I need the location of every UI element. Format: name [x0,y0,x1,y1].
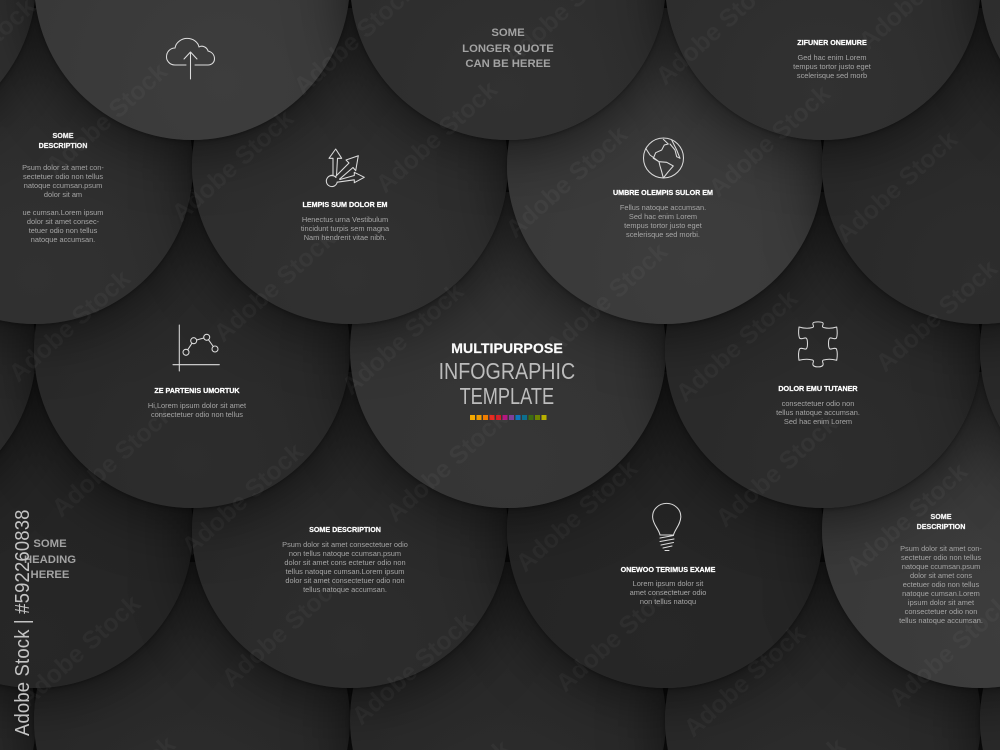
panel: cloud upload [34,0,350,140]
text block: some description right: SOME [930,513,952,521]
text block: some description right: DESCRIPTION [917,523,965,531]
vertical stock id label: Adobe Stock | #592260838 [11,509,34,736]
text block: some description: dolor sit amet cons ectetuer odio non [284,558,406,567]
title: multipurpose infographic template: INFOGRAPHIC [439,358,575,384]
icon: light bulb [652,502,682,551]
text block: zifuner onemure: tempus tortor justo eget [793,62,871,71]
watermark layer: Adobe Stock [209,224,341,348]
quote text [462,27,554,70]
panel: some description left [0,8,193,324]
text block: onewoo terimus exame: Lorem ipsum dolor sit [633,579,703,588]
quote text: CAN BE HEREE [465,58,551,70]
panel: some description wide [192,372,508,688]
watermark layer: Adobe Stock [671,284,803,408]
text block: lempis sum dolor em: Nam hendrerit vitae nibh. [304,233,386,242]
watermark layer: Adobe Stock [551,574,683,698]
text block: dolor emu tutaner [776,385,860,426]
text block: umbre olempis sulor em: Sed hac enim Lorem [629,212,697,221]
title: multipurpose infographic template: TEMPLATE [460,383,554,409]
heading: some heading here [24,538,76,581]
circle: top row left edge [0,0,36,140]
watermark layer: Adobe Stock [167,104,299,228]
panel: onewoo terimus exame [507,372,823,688]
text block: onewoo terimus exame [620,566,716,606]
title: multipurpose infographic template [439,341,575,409]
heading: some heading here: SOME [33,538,67,550]
circle: bottom row right [665,562,981,750]
watermark layer: Adobe Stock [217,569,349,693]
panel: lempis sum dolor em [192,8,508,324]
title: multipurpose infographic template: MULTIPURPOSE [451,341,563,357]
text block: some description: tellus natoque cumsan.Lorem ipsum [286,567,404,576]
text block: some description right: dolor sit amet cons [910,571,972,580]
quote text: LONGER QUOTE [462,42,554,54]
watermark layer: Adobe Stock [511,454,643,578]
text block: some description right: Psum dolor sit amet con- [900,544,982,552]
watermark layer: Adobe Stock [831,125,963,249]
text block: some description left: Psum dolor sit amet con- [22,162,104,172]
text block: some description left: DESCRIPTION [39,142,87,150]
text block: some description: tellus natoque accumsan. [303,585,387,594]
text block: some description right: ipsum dolor sit amet [908,598,974,607]
panel: some heading here [0,372,193,688]
text block: some description right: consectetuer odio non [905,607,977,616]
watermark layer: Adobe Stock [501,120,633,244]
text block: umbre olempis sulor em: Fellus natoque accumsan. [620,203,706,212]
text block: lempis sum dolor em: Henectus urna Vestibulum [302,215,388,224]
panel: zifuner onemure [665,0,981,140]
panel: dolor emu tutaner [665,192,981,508]
text block: ze partenis umortuk: consectetuer odio non tellus [151,410,243,419]
circle: bottom row left [34,562,350,750]
watermark layer: Adobe Stock [371,75,503,199]
heading: some heading here: HEADING [24,554,76,566]
text block: ze partenis umortuk: Hi,Lorem ipsum dolor sit amet [148,401,246,410]
text block: zifuner onemure: Ged hac enim Lorem [797,53,866,62]
text block: lempis sum dolor em [301,201,390,242]
icon: puzzle piece [798,321,838,368]
text block: some description [282,526,408,594]
heading: some heading here: HEREE [31,569,69,581]
text block: some description right: natoque ccumsan.psum [902,562,980,571]
text block: some description right [899,513,983,625]
watermark layer: Adobe Stock [871,254,1000,378]
circle: second row right edge [822,8,1000,324]
circle: middle row left edge [0,192,36,508]
circle: bottom row left edge [0,562,36,750]
watermark layer: Adobe Stock [41,57,173,181]
text block: some description left [22,132,104,244]
icon: line chart [172,324,220,372]
icon: branching arrows [326,148,365,188]
watermark layer: Adobe Stock [679,619,811,743]
text block: some description left: ue cumsan.Lorem ipsum [23,208,103,217]
text block: lempis sum dolor em: tincidunt turpis sem magna [301,224,389,233]
text block: onewoo terimus exame: amet consectetuer odio [630,588,706,597]
text block: dolor emu tutaner: tellus natoque accumsan. [776,408,860,417]
text block: onewoo terimus exame: ONEWOO TERIMUS EXAME [621,566,715,574]
quote text: SOME [491,27,525,39]
circle: bottom row right edge [980,562,1000,750]
watermark layer: Adobe Stock [381,404,513,528]
watermark layer: Adobe Stock [177,437,309,561]
text block: ze partenis umortuk: ZE PARTENIS UMORTUK [154,387,240,395]
text block: some description: dolor sit amet consectetuer odio non [285,576,405,585]
text block: onewoo terimus exame: non tellus natoqu [640,597,696,606]
watermark layer: Adobe Stock [711,409,843,533]
watermark layer: Adobe Stock [14,589,146,713]
text block: dolor emu tutaner: Sed hac enim Lorem [784,417,852,426]
text block: some description left: natoque accumsan. [31,235,95,244]
text block: some description left: SOME [52,132,74,140]
text block: dolor emu tutaner: DOLOR EMU TUTANER [778,385,858,393]
icon: globe [643,138,684,178]
text block: some description right: sectetuer odio non tellus [901,553,981,562]
text block: ze partenis umortuk [148,387,246,419]
watermark layer: Adobe Stock [541,237,673,361]
text block: some description right: ectetuer odio non tellus [903,580,979,589]
watermark layer: Adobe Stock [347,607,479,731]
text block: umbre olempis sulor em [613,189,713,239]
text block: some description left: sectetuer odio non tellus [23,172,103,181]
watermark layer: Adobe Stock [841,457,973,581]
text block: zifuner onemure [793,39,871,80]
circle: bottom row centre [350,562,666,750]
panel: central title [350,192,666,508]
panel: umbre olempis sulor em [507,8,823,324]
text block: some description: SOME DESCRIPTION [309,526,381,534]
watermark layer: Adobe Stock [4,264,136,388]
text block: lempis sum dolor em: LEMPIS SUM DOLOR EM [303,201,387,209]
text block: some description left: natoque ccumsan.psum [24,181,102,190]
text block: some description: Psum dolor sit amet consectetuer odio [282,540,408,549]
text block: some description: non tellus natoque ccumsan.psum [289,549,401,558]
text block: some description left: dolor sit amet consec- [27,217,99,226]
text block: some description right: tellus natoque accumsan. [899,616,983,625]
text block: umbre olempis sulor em: scelerisque sed morbi. [626,230,700,239]
text block: zifuner onemure: scelerisque sed morb [797,71,867,80]
panel: ze partenis umortuk [34,192,350,508]
text block: umbre olempis sulor em: UMBRE OLEMPIS SULOR EM [613,189,713,197]
watermark layer: Adobe Stock [47,399,179,523]
icon: cloud upload [166,38,215,80]
text block: some description left: dolor sit am [44,190,82,199]
watermark layer: Adobe Stock [337,277,469,401]
text block: some description left: tetuer odio non tellus [29,226,97,235]
text block: dolor emu tutaner: consectetuer odio non [782,399,854,408]
circle: middle row right edge [980,192,1000,508]
circle: top row right edge [980,0,1000,140]
text block: umbre olempis sulor em: tempus tortor justo eget [624,221,702,230]
watermark layer: Adobe Stock [704,79,836,203]
colour square strip [470,415,546,420]
text block: zifuner onemure: ZIFUNER ONEMURE [797,39,867,47]
panel: some description right [822,372,1000,688]
panel: longer quote [350,0,666,140]
text block: some description right: natoque cumsan.Lorem [902,589,980,598]
